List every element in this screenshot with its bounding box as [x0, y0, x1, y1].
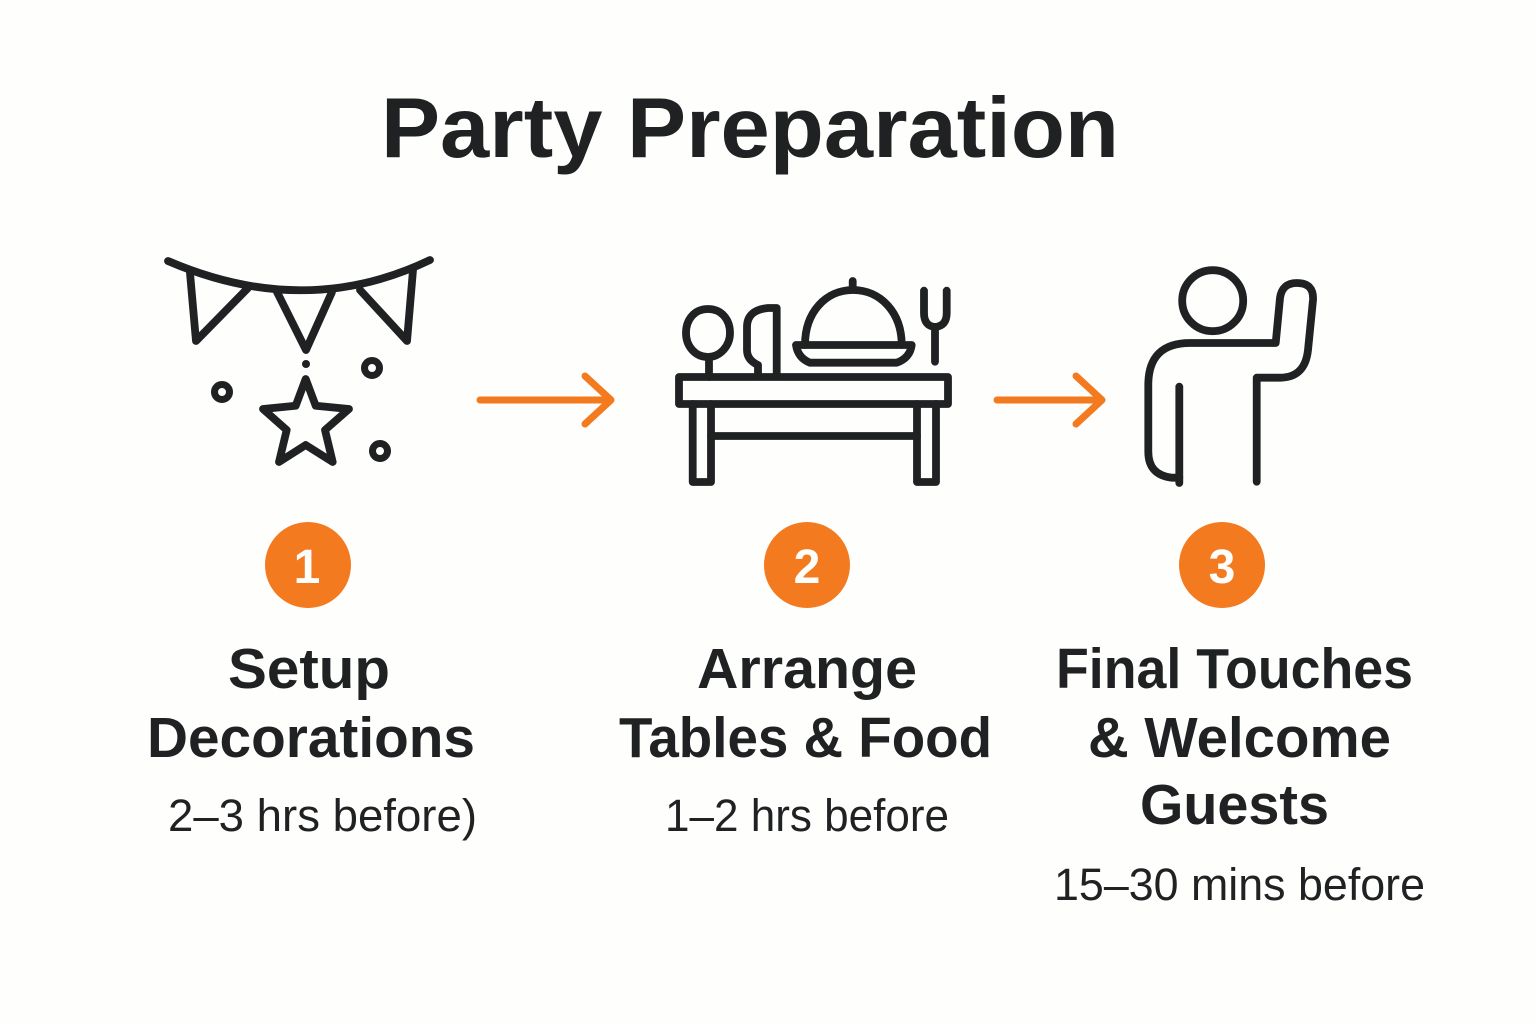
icon: waving person	[1148, 270, 1313, 483]
confetti circle top right	[364, 360, 380, 376]
step 3 text: Final Touches	[1056, 637, 1413, 701]
icon: bunting and star decorations	[168, 260, 430, 462]
confetti circle left	[214, 384, 230, 400]
left flag	[190, 273, 248, 341]
cloche dome	[805, 290, 902, 345]
step 2 badge: 2	[794, 541, 820, 594]
star	[263, 379, 349, 462]
step 3 text: & Welcome	[1088, 706, 1391, 770]
spoon	[686, 309, 730, 377]
step 2 badge	[764, 522, 850, 608]
arrow: step 1 to step 2	[480, 376, 611, 424]
step 3 badge: 3	[1209, 541, 1235, 594]
title: Party Preparation	[381, 81, 1119, 176]
step 1 text: Decorations	[147, 706, 475, 770]
step 3 text: 15–30 mins before	[1054, 859, 1425, 910]
knife	[747, 308, 777, 376]
table right leg	[917, 404, 936, 482]
small dot	[302, 360, 310, 368]
body and raised arm	[1148, 283, 1313, 482]
confetti circle bottom right	[372, 444, 388, 458]
step 2 text	[619, 637, 992, 841]
head	[1182, 270, 1243, 331]
step 1 text: 2–3 hrs before)	[168, 790, 477, 841]
step 2 text: 1–2 hrs before	[665, 790, 949, 841]
step 2 text: Tables & Food	[619, 706, 992, 770]
step 1 text	[147, 637, 477, 841]
table left leg	[693, 404, 711, 482]
step 1 text: Setup	[228, 637, 390, 701]
cloche knob	[849, 281, 857, 288]
arrow: step 2 to step 3	[997, 376, 1102, 424]
plate	[796, 345, 912, 363]
icon: table with food	[679, 281, 948, 482]
bunting string	[168, 260, 430, 290]
middle flag	[277, 292, 332, 350]
inner arm line	[1175, 387, 1183, 483]
step 3 text	[1054, 637, 1425, 910]
step 3 badge	[1179, 522, 1265, 608]
table crossbar	[711, 432, 917, 440]
step 1 badge	[265, 522, 351, 608]
table top	[679, 377, 948, 404]
step 1 badge: 1	[294, 541, 320, 594]
fork	[924, 291, 947, 362]
step 3 text: Guests	[1140, 773, 1329, 837]
step 2 text: Arrange	[697, 637, 917, 701]
right flag	[360, 270, 413, 341]
